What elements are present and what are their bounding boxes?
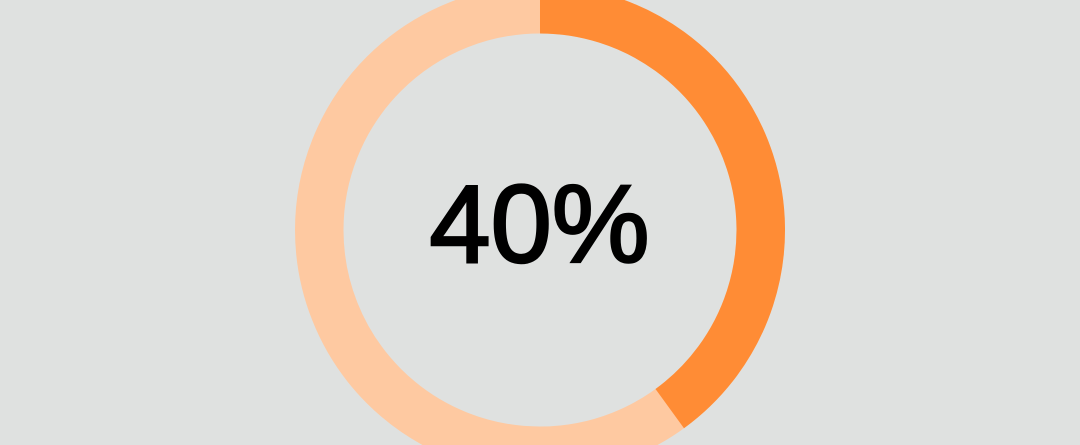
- donut track: remaining 60%: [319, 9, 761, 445]
- center value: 40%: [429, 163, 650, 286]
- donut segment: 40%: [540, 9, 761, 409]
